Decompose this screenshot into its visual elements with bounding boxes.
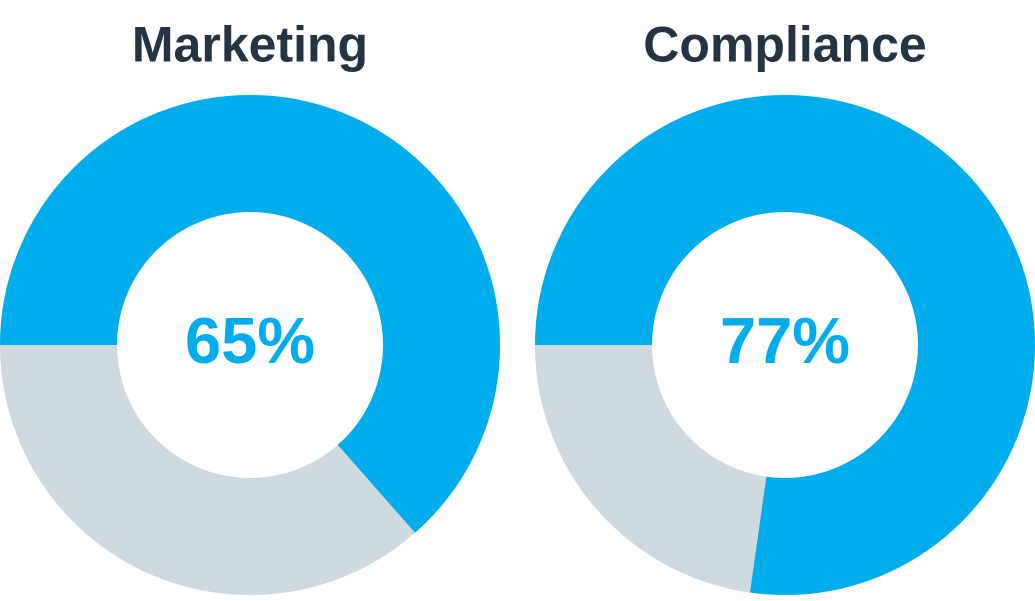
title: Compliance: Compliance — [643, 16, 927, 72]
donut chart: marketing 65% — [58, 154, 442, 536]
value: 77%: 77% — [720, 304, 850, 377]
value: 65%: 65% — [185, 304, 315, 377]
title: Marketing: Marketing — [132, 16, 368, 72]
donut chart: compliance 77% — [594, 154, 976, 536]
